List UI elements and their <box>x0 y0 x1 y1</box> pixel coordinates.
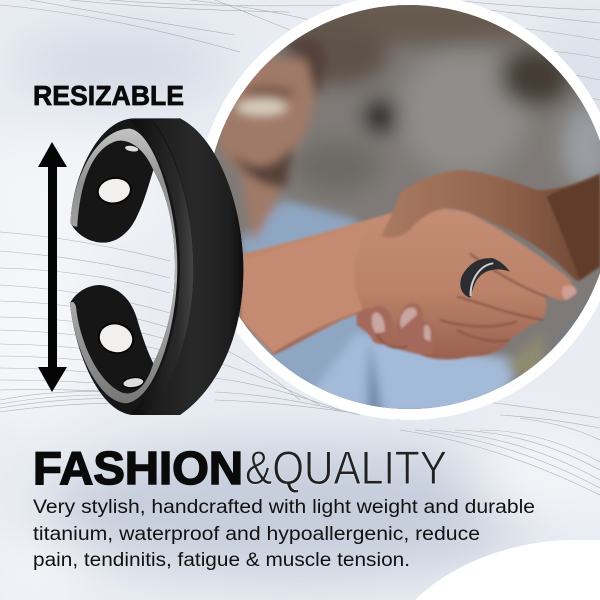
heading: FASHION & QUALITY <box>33 441 447 494</box>
heading: FASHION & QUALITY: &QUALITY <box>245 441 447 494</box>
ring product <box>70 118 243 415</box>
heading: FASHION & QUALITY: FASHION <box>33 442 243 494</box>
body text <box>33 497 535 571</box>
magnet small bottom <box>122 376 145 389</box>
blurred man and shirt <box>217 37 600 417</box>
blurred backdrop <box>214 5 600 409</box>
photo: handshake <box>214 5 600 409</box>
label: RESIZABLE: RESIZABLE <box>33 80 184 111</box>
body text: Very stylish, handcrafted with light weight and durable <box>33 497 535 518</box>
white photo ring <box>196 0 600 420</box>
ring outer band <box>147 118 243 415</box>
fingers below the handshake <box>357 303 435 354</box>
white corner curve <box>415 540 600 600</box>
magnet upper <box>96 175 133 206</box>
small ring on finger <box>460 258 510 298</box>
ring bevel <box>130 120 193 415</box>
arrow: vertical double-headed <box>38 142 67 392</box>
magnet small top <box>125 145 139 152</box>
body text: pain, tendinitis, fatigue & muscle tension. <box>33 550 410 571</box>
body text: titanium, waterproof and hypoallergenic, reduce <box>33 524 480 545</box>
ring grey inner lip <box>70 129 177 403</box>
skin arm and hands <box>240 170 600 360</box>
ring silhouette <box>70 118 243 415</box>
magnet lower <box>95 320 137 357</box>
